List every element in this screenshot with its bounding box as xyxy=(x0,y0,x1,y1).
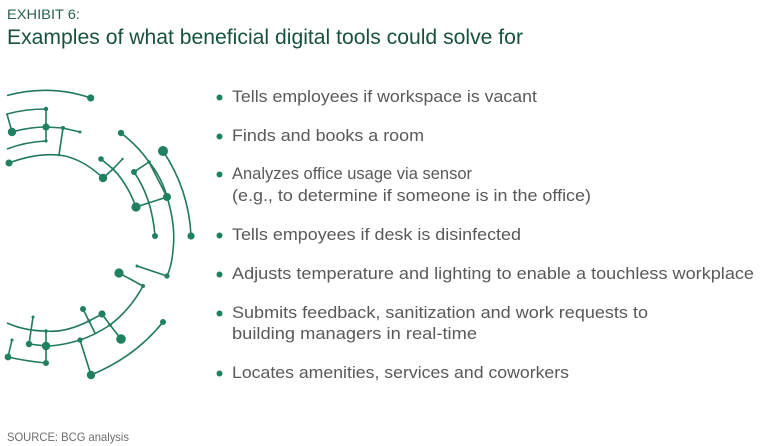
bullet: temperature and lighting: Adjusts temperature and lighting to enable a touchless workplace xyxy=(232,264,754,283)
exhibit label: EXHIBIT 6: xyxy=(7,6,80,22)
bullet: book a room: Finds and books a room xyxy=(232,126,424,145)
bullet: office usage xyxy=(216,164,591,205)
bullet: office usage: (e.g., to determine if someone is in the office) xyxy=(232,186,591,205)
bullet: office usage: Analyzes office usage via sensor xyxy=(232,164,472,183)
bullet: desk disinfected: Tells empoyees if desk is disinfected xyxy=(232,225,521,244)
title: Examples of what beneficial digital tools could solve for xyxy=(7,26,523,49)
bullet: feedback and requests: Submits feedback, sanitization and work requests to xyxy=(232,303,648,322)
bullet: feedback and requests xyxy=(216,303,648,343)
bullet: feedback and requests: building managers in real-time xyxy=(232,324,477,343)
source note: SOURCE: BCG analysis xyxy=(7,430,129,444)
network arcs illustration xyxy=(5,90,195,379)
bullet list xyxy=(216,87,754,382)
bullet: locate amenities: Locates amenities, services and coworkers xyxy=(232,363,569,382)
bullet: vacant workspace: Tells employees if workspace is vacant xyxy=(232,87,537,106)
